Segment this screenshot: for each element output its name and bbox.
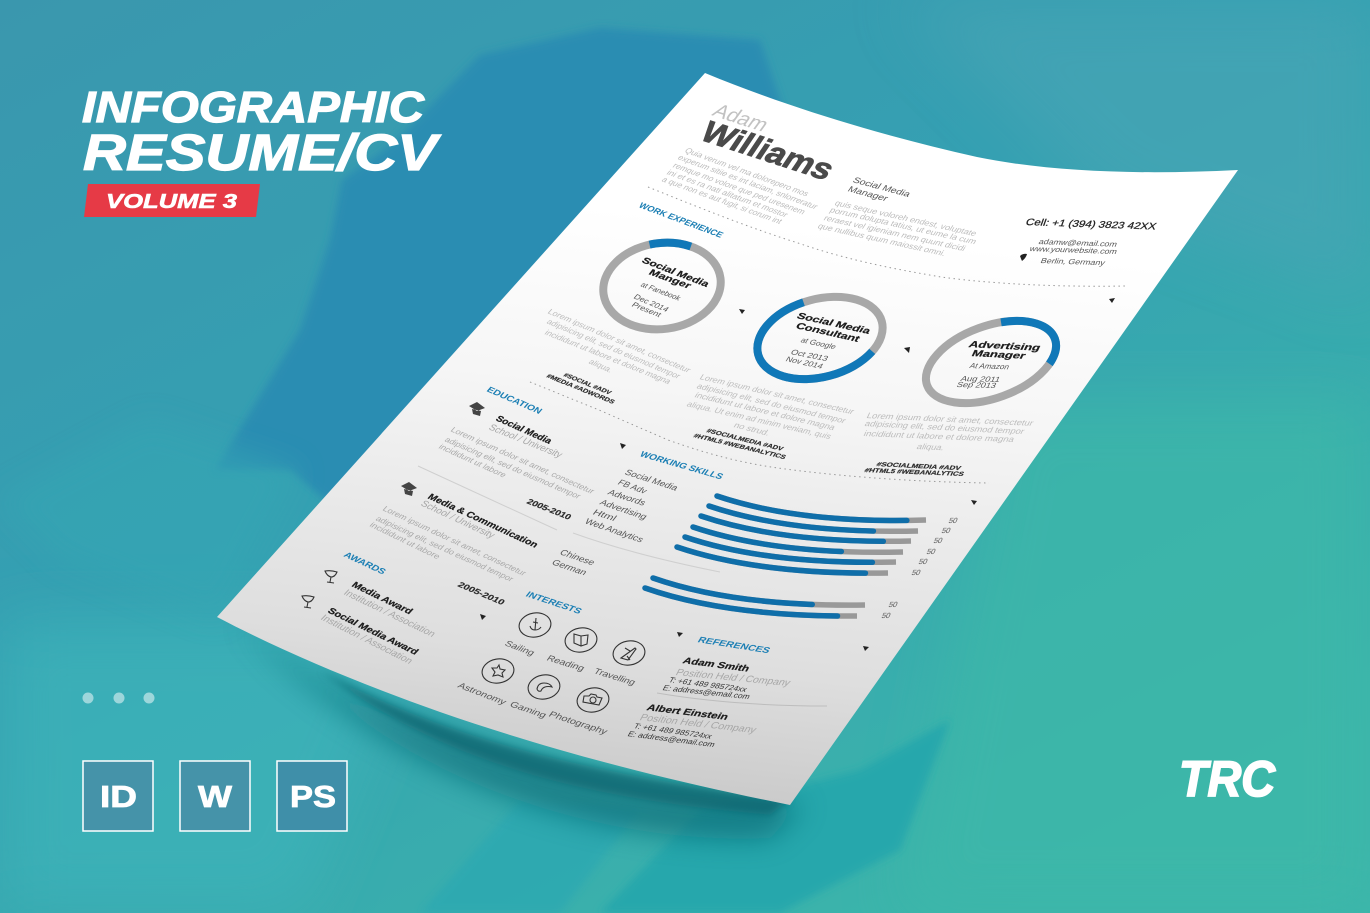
job ring 2: Oct 2013 xyxy=(789,348,830,363)
name: Adam: Adam xyxy=(708,100,773,136)
skill labels: German xyxy=(550,558,589,577)
reference 2 xyxy=(626,703,758,749)
section: working skills xyxy=(550,449,960,620)
job description 3: #HTML5 #WEBANALYTICS xyxy=(863,467,965,478)
job ring 3 xyxy=(915,305,1067,419)
reference 1: Position Held / Company xyxy=(674,668,792,689)
section: awards: Institution / Association xyxy=(341,588,438,639)
reference 1: E: address@email.com xyxy=(661,684,752,701)
degree 1 description: Lorem ipsum dolor sit amet, consectetur xyxy=(449,426,597,496)
heading: references: REFERENCES xyxy=(696,635,773,655)
job ring 3: Aug 2011 xyxy=(959,374,1002,384)
section: interests xyxy=(456,590,647,736)
section: education: School / University xyxy=(486,423,565,460)
title line 2: RESUME/CV xyxy=(83,124,442,181)
interest labels: Sailing xyxy=(503,639,537,657)
section: awards: Institution / Association xyxy=(318,613,415,666)
job ring 2: Nov 2014 xyxy=(784,355,826,371)
skill values xyxy=(880,516,960,620)
heading: working skills: WORKING SKILLS xyxy=(638,449,726,481)
skill values: 50 xyxy=(880,611,893,620)
job description 3: aliqua. xyxy=(915,441,946,452)
format badge: PS xyxy=(277,761,347,831)
degree 1 description: incididunt ut labore xyxy=(437,443,509,479)
job description 1: Lorem ipsum dolor sit amet, consectetur xyxy=(546,308,693,374)
job description 2: no strud. xyxy=(732,421,772,437)
interest labels: Travelling xyxy=(592,666,638,687)
job description 2: incididunt ut labore et dolore magna xyxy=(693,391,838,432)
skill labels: Advertising xyxy=(598,498,650,521)
heading: education: EDUCATION xyxy=(485,385,544,416)
skill values: 50 xyxy=(910,568,923,577)
skill values: 50 xyxy=(887,600,900,609)
icon: book xyxy=(563,625,599,655)
skill labels: Html xyxy=(591,508,619,523)
title xyxy=(82,83,442,181)
heading: interests: INTERESTS xyxy=(524,590,584,616)
section: references xyxy=(626,635,827,749)
format badge: W xyxy=(180,761,250,831)
job ring 2: Social Media xyxy=(795,311,874,336)
panel: resume paper xyxy=(217,73,1238,805)
icon: graduation cap 1 xyxy=(469,402,485,416)
intro paragraph left: Quia verum vel ma dolorepero mos xyxy=(683,146,811,198)
job ring 3: Advertising xyxy=(967,339,1043,353)
intro paragraph right: porrum dolupta tatius, ut eume la cum xyxy=(828,206,978,246)
intro paragraph left: remque mo volore que ped uresenem xyxy=(671,161,807,216)
section heading: work experience: WORK EXPERIENCE xyxy=(637,201,726,239)
job description 1 xyxy=(543,308,693,406)
paper shadow xyxy=(235,620,805,839)
job ring 2: at Google xyxy=(799,336,838,351)
icon: graduation cap 2 xyxy=(401,482,417,496)
icon: trophy 1 xyxy=(325,571,337,583)
contact details: adamw@email.com xyxy=(1037,237,1119,249)
volume badge xyxy=(84,184,260,217)
degree 2 description: Lorem ipsum dolor sit amet, consectetur xyxy=(381,505,528,578)
reference 2: E: address@email.com xyxy=(626,730,717,749)
job description 2: Lorem ipsum dolor sit amet, consectetur xyxy=(698,373,856,416)
degree 2: Media & Communication xyxy=(426,492,541,550)
pagination dots xyxy=(82,692,154,704)
name: Williams: Williams xyxy=(694,114,842,186)
paper sheet xyxy=(217,73,1238,805)
format badge: PS: PS xyxy=(290,779,336,814)
job ring 3: Manager xyxy=(970,348,1028,361)
volume badge: VOLUME 3 xyxy=(106,190,238,213)
heading: awards: AWARDS xyxy=(342,550,389,576)
job title header xyxy=(846,175,913,203)
intro paragraph left: experum sitiie es int laciam, snlorreratur xyxy=(676,153,820,211)
format badge: ID xyxy=(83,761,153,831)
degree 1 description: adipisicing elit, sed do eiusmod tempor xyxy=(443,436,583,501)
contact details: www.yourwebsite.com xyxy=(1027,244,1119,256)
job description 2 xyxy=(685,373,856,461)
degree 1 years: 2005-2010 xyxy=(525,497,574,522)
degree 1: Social Media xyxy=(494,414,555,446)
job description 1: incididunt ut labore et dolore magna xyxy=(543,329,673,386)
job ring 1: Present xyxy=(630,301,664,319)
job description 2: #HTML5 #WEBANALYTICS xyxy=(692,433,787,461)
job ring 2 xyxy=(748,284,892,392)
job ring 3: Sep 2013 xyxy=(955,380,998,390)
degree 2 years: 2005-2010 xyxy=(456,581,507,607)
intro paragraph right: quis seque voloreh endest, voluptate xyxy=(833,199,979,238)
job ring 1: at Fanebook xyxy=(639,280,683,302)
job description 3 xyxy=(862,410,1036,478)
intro paragraph right: que nullibus quum maiossit omni. xyxy=(816,222,948,258)
icon: plane xyxy=(611,638,647,668)
job description 1: adipisicing elit, sed do eiusmod tempor xyxy=(545,318,683,381)
job description 2: adipisicing elit, sed do eiusmod tempor xyxy=(695,382,848,425)
skill labels: FB Adv xyxy=(616,478,650,496)
section: education: School / University xyxy=(418,499,497,541)
intro paragraph left xyxy=(660,146,820,226)
job ring 2: Consultant xyxy=(794,321,862,344)
skill labels xyxy=(550,468,681,577)
job description 3: adipisicing elit, sed do eiusmod tempor xyxy=(863,418,1027,436)
skill labels: Chinese xyxy=(558,548,597,567)
reference 1 xyxy=(661,656,792,701)
icon: gamepad xyxy=(526,672,562,702)
icon: star xyxy=(480,656,516,686)
job description 1: #MEDIA #ADWORDS xyxy=(545,373,616,406)
interest labels: Gaming xyxy=(508,699,549,720)
intro paragraph left: ini et es ra nati alitatum et mostor xyxy=(665,168,790,219)
title line 1: INFOGRAPHIC xyxy=(82,83,425,132)
interest labels: Reading xyxy=(545,653,587,673)
award 2: Social Media Award xyxy=(326,606,421,656)
small arrows xyxy=(480,298,1115,651)
skill labels: Adwords xyxy=(606,488,649,508)
job description 3: Lorem ipsum dolor sit amet, consectetur xyxy=(865,410,1036,428)
reference 1: T: +61 489 985724xx xyxy=(667,676,749,694)
job ring 1 xyxy=(598,235,726,337)
interest labels xyxy=(456,639,638,736)
degree 2 description: incididunt ut labore xyxy=(368,521,443,561)
skill labels: Web Analytics xyxy=(583,517,647,544)
reference 1: Adam Smith xyxy=(681,656,752,673)
skill values: 50 xyxy=(925,547,938,556)
skill values: 50 xyxy=(947,516,960,525)
job description 2: aliqua. Ut enim ad minim veniam, quis xyxy=(685,400,833,441)
job title header: Social Media xyxy=(851,175,913,199)
job description 1: #SOCIAL #ADV xyxy=(562,372,614,397)
skill labels: Social Media xyxy=(623,468,681,492)
icon: location pin xyxy=(1020,254,1027,261)
skill values: 50 xyxy=(917,557,930,566)
skill values: 50 xyxy=(932,536,945,545)
reference 2: T: +61 489 985724xx xyxy=(632,722,714,741)
contact details xyxy=(1024,217,1158,267)
interest labels: Astronomy xyxy=(456,681,510,707)
interest labels: Photography xyxy=(547,709,611,736)
skill values: 50 xyxy=(940,526,953,535)
contact details: Cell: +1 (394) 3823 42XX xyxy=(1024,217,1158,232)
job ring 1: Manger xyxy=(647,268,694,291)
job ring 3: At Amazon xyxy=(968,361,1011,371)
intro paragraph left: a que non es aut fugit, si corum int xyxy=(660,175,785,226)
skill bars xyxy=(645,496,926,616)
icon: camera xyxy=(575,685,611,715)
section: awards xyxy=(302,550,438,666)
intro paragraph right xyxy=(816,199,979,258)
job title header: Manager xyxy=(846,184,890,203)
TRC logo: TRC xyxy=(1179,751,1276,807)
section: education xyxy=(368,385,720,607)
reference 2: Albert Einstein xyxy=(645,703,731,722)
icon: trophy 2 xyxy=(302,596,314,608)
job description 3: incididunt ut labore et dolore magna xyxy=(862,428,1017,444)
contact details: Berlin, Germany xyxy=(1039,256,1107,267)
job description 3: #SOCIALMEDIA #ADV xyxy=(875,461,963,472)
job description 2: #SOCIALMEDIA #ADV xyxy=(705,428,786,453)
job ring 1: Dec 2014 xyxy=(632,293,672,314)
format badge: W: W xyxy=(198,779,233,814)
reference 2: Position Held / Company xyxy=(638,713,758,736)
format badge: ID: ID xyxy=(100,779,137,814)
icon: anchor xyxy=(517,610,553,640)
award 1: Media Award xyxy=(350,580,415,616)
degree 2 description: adipisicing elit, sed do eiusmod tempor xyxy=(374,515,516,583)
intro paragraph right: reraest vel igieniam nem quunt dicidi xyxy=(822,214,968,253)
job description 1: aliqua. xyxy=(587,358,615,374)
job ring 1: Social Media xyxy=(640,256,713,289)
